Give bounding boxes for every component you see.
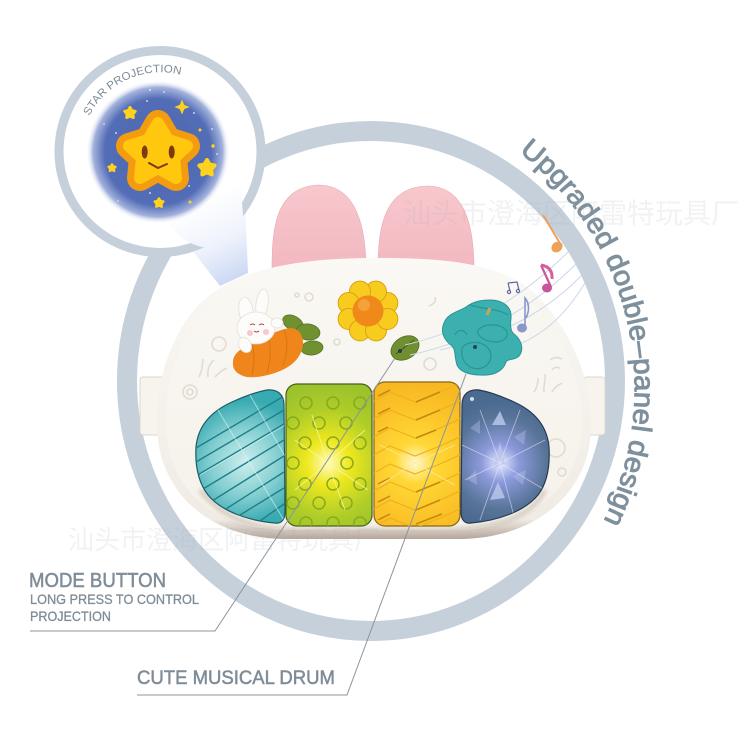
key shadow — [200, 490, 545, 530]
rabbit — [236, 288, 283, 355]
projection light beam — [170, 178, 248, 286]
mushroom button — [442, 300, 522, 375]
mode button leader line — [30, 358, 395, 631]
small stars — [108, 100, 215, 207]
yellow key — [372, 382, 462, 528]
music staff and notes — [405, 215, 585, 355]
leaf button — [386, 331, 424, 365]
small note — [507, 282, 520, 294]
toy — [140, 185, 605, 539]
circular label: STAR PROJECTION — [84, 64, 182, 115]
watermark top: 汕头市澄海区阿雷特玩具厂 — [403, 198, 739, 229]
mode button description: LONG PRESS TO CONTROL — [30, 591, 199, 607]
toy ears — [272, 185, 474, 270]
curved heading: Upgraded double–panel design — [523, 138, 653, 525]
projection circle — [54, 46, 266, 256]
callout: cute musical drum — [137, 374, 466, 695]
teal key — [196, 390, 290, 528]
blue note — [517, 298, 528, 332]
side tabs — [140, 377, 605, 435]
smiling star — [129, 123, 187, 178]
drum leader line — [137, 374, 466, 695]
rabbit and carrot — [233, 288, 324, 377]
tiny stars — [103, 88, 218, 204]
mode button title: MODE BUTTON — [29, 570, 166, 592]
light flares — [295, 415, 455, 510]
carrot — [233, 328, 303, 377]
beam inside frame — [168, 180, 244, 248]
pink note — [541, 265, 552, 292]
carrot leaves — [280, 312, 324, 356]
orange note — [543, 215, 565, 255]
green key — [286, 384, 372, 529]
embossed decorations — [183, 293, 566, 476]
mode button description: PROJECTION — [30, 608, 111, 624]
drum label: CUTE MUSICAL DRUM — [137, 668, 335, 689]
toy body — [157, 258, 591, 539]
blue key — [461, 390, 549, 523]
callout: mode button — [29, 358, 395, 631]
watermark bottom: 汕头市澄海区阿雷特玩具厂 — [68, 525, 380, 555]
keys — [196, 382, 549, 530]
large ring — [127, 131, 615, 631]
starry sky — [86, 80, 230, 224]
circle frame — [59, 50, 261, 252]
flower button — [338, 281, 398, 341]
